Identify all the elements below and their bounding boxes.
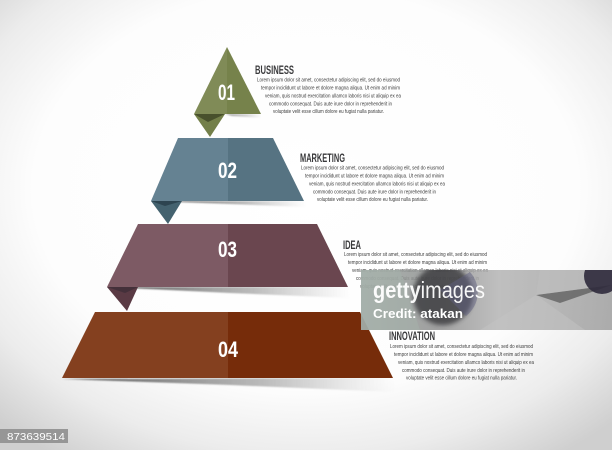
text block: business: BUSINESS <box>255 63 294 77</box>
text block: business <box>255 63 401 115</box>
text block: idea: commodo consequat. Duis aute irure dolor in reprehenderit in <box>356 276 479 282</box>
text block: idea: Lorem ipsum dolor sit amet, consectetur adipiscing elit, sed do eiusmod <box>344 252 487 258</box>
text block: innovation: voluptate velit esse cillum dolore eu fugiat nulla pariatur. <box>406 376 517 382</box>
text block: idea: tempor incididunt ut labore et dolore magna aliqua. Ut enim ad minim <box>348 260 487 266</box>
text block: marketing: tempor incididunt ut labore et dolore magna aliqua. Ut enim ad minim <box>305 174 444 180</box>
text block: innovation: INNOVATION <box>389 329 435 343</box>
number 03: 03 <box>218 237 237 262</box>
text block: business: voluptate velit esse cillum dolore eu fugiat nulla pariatur. <box>273 109 384 115</box>
text block: marketing <box>300 151 445 203</box>
tier 3 shadow <box>107 287 350 298</box>
pyramid tier 4 <box>62 312 393 378</box>
pyramid tier 3 <box>107 224 348 311</box>
pyramid tier 1 <box>194 47 261 137</box>
text block: idea: voluptate velit esse cillum dolore eu fugiat nulla pariatur. <box>360 284 471 290</box>
text block: marketing: commodo consequat. Duis aute irure dolor in reprehenderit in <box>313 190 436 196</box>
text block: business: veniam, quis nostrud exercitation ullamco laboris nisi ut aliquip ex ea <box>265 94 401 100</box>
text block: business: tempor incididunt ut labore et dolore magna aliqua. Ut enim ad minim <box>261 86 400 92</box>
tier 4 shadow <box>62 378 395 392</box>
text block: idea <box>343 238 488 290</box>
text block: innovation: tempor incididunt ut labore et dolore magna aliqua. Ut enim ad minim <box>394 352 533 358</box>
text block: innovation: veniam, quis nostrud exercitation ullamco laboris nisi ut aliquip ex ea <box>398 360 534 366</box>
text block: marketing: veniam, quis nostrud exercitation ullamco laboris nisi ut aliquip ex ea <box>309 182 445 188</box>
watermark credit: Credit: atakan <box>373 307 463 321</box>
pyramid tier 2 <box>151 138 304 224</box>
text block: innovation: Lorem ipsum dolor sit amet, consectetur adipiscing elit, sed do eiusmod <box>390 344 533 350</box>
number 01: 01 <box>218 80 235 105</box>
image id tag: 873639514 <box>7 431 65 443</box>
tier 1 shadow <box>225 114 262 118</box>
text block: marketing: Lorem ipsum dolor sit amet, consectetur adipiscing elit, sed do eiusmod <box>301 166 444 172</box>
tier 2 shadow <box>151 201 306 207</box>
watermark logo: gettyimages <box>373 277 485 303</box>
text block: innovation: commodo consequat. Duis aute irure dolor in reprehenderit in <box>402 368 525 374</box>
number 04: 04 <box>218 337 239 362</box>
text block: idea: veniam, quis nostrud exercitation ullamco laboris nisi ut aliquip ex ea <box>352 268 488 274</box>
image id tag <box>0 429 68 443</box>
text block: marketing: MARKETING <box>300 151 345 165</box>
text block: business: Lorem ipsum dolor sit amet, consectetur adipiscing elit, sed do eiusmod <box>257 78 400 84</box>
text block: idea: IDEA <box>343 238 361 252</box>
text block: innovation <box>389 329 534 382</box>
text block: business: commodo consequat. Duis aute irure dolor in reprehenderit in <box>269 102 392 108</box>
text block: marketing: voluptate velit esse cillum dolore eu fugiat nulla pariatur. <box>317 197 428 203</box>
watermark band <box>361 270 612 330</box>
number 02: 02 <box>218 158 237 183</box>
